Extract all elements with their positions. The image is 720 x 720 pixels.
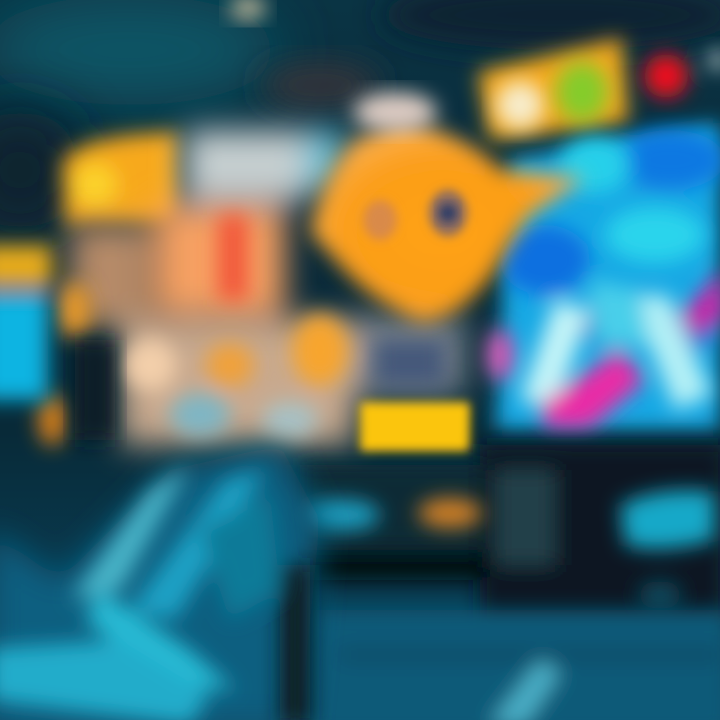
figure: dark silhouette: [75, 340, 115, 440]
button: yellow: [360, 402, 470, 452]
figure: blue hand foreground: [0, 445, 320, 720]
panel: lower dark console: [300, 445, 720, 625]
panel: left edge cyan card: [0, 245, 52, 400]
panel: top right yellow and green card: [478, 38, 628, 140]
collage details: [38, 215, 445, 446]
console indicators: [300, 490, 715, 609]
panel: left yellow card: [62, 132, 180, 225]
icon: orange character: [310, 92, 585, 322]
panel: right blue screen: [486, 122, 720, 430]
panel: centre collage cards: [70, 130, 465, 445]
floor: teal lower surface: [310, 610, 720, 720]
icon: red dot: [644, 51, 720, 98]
